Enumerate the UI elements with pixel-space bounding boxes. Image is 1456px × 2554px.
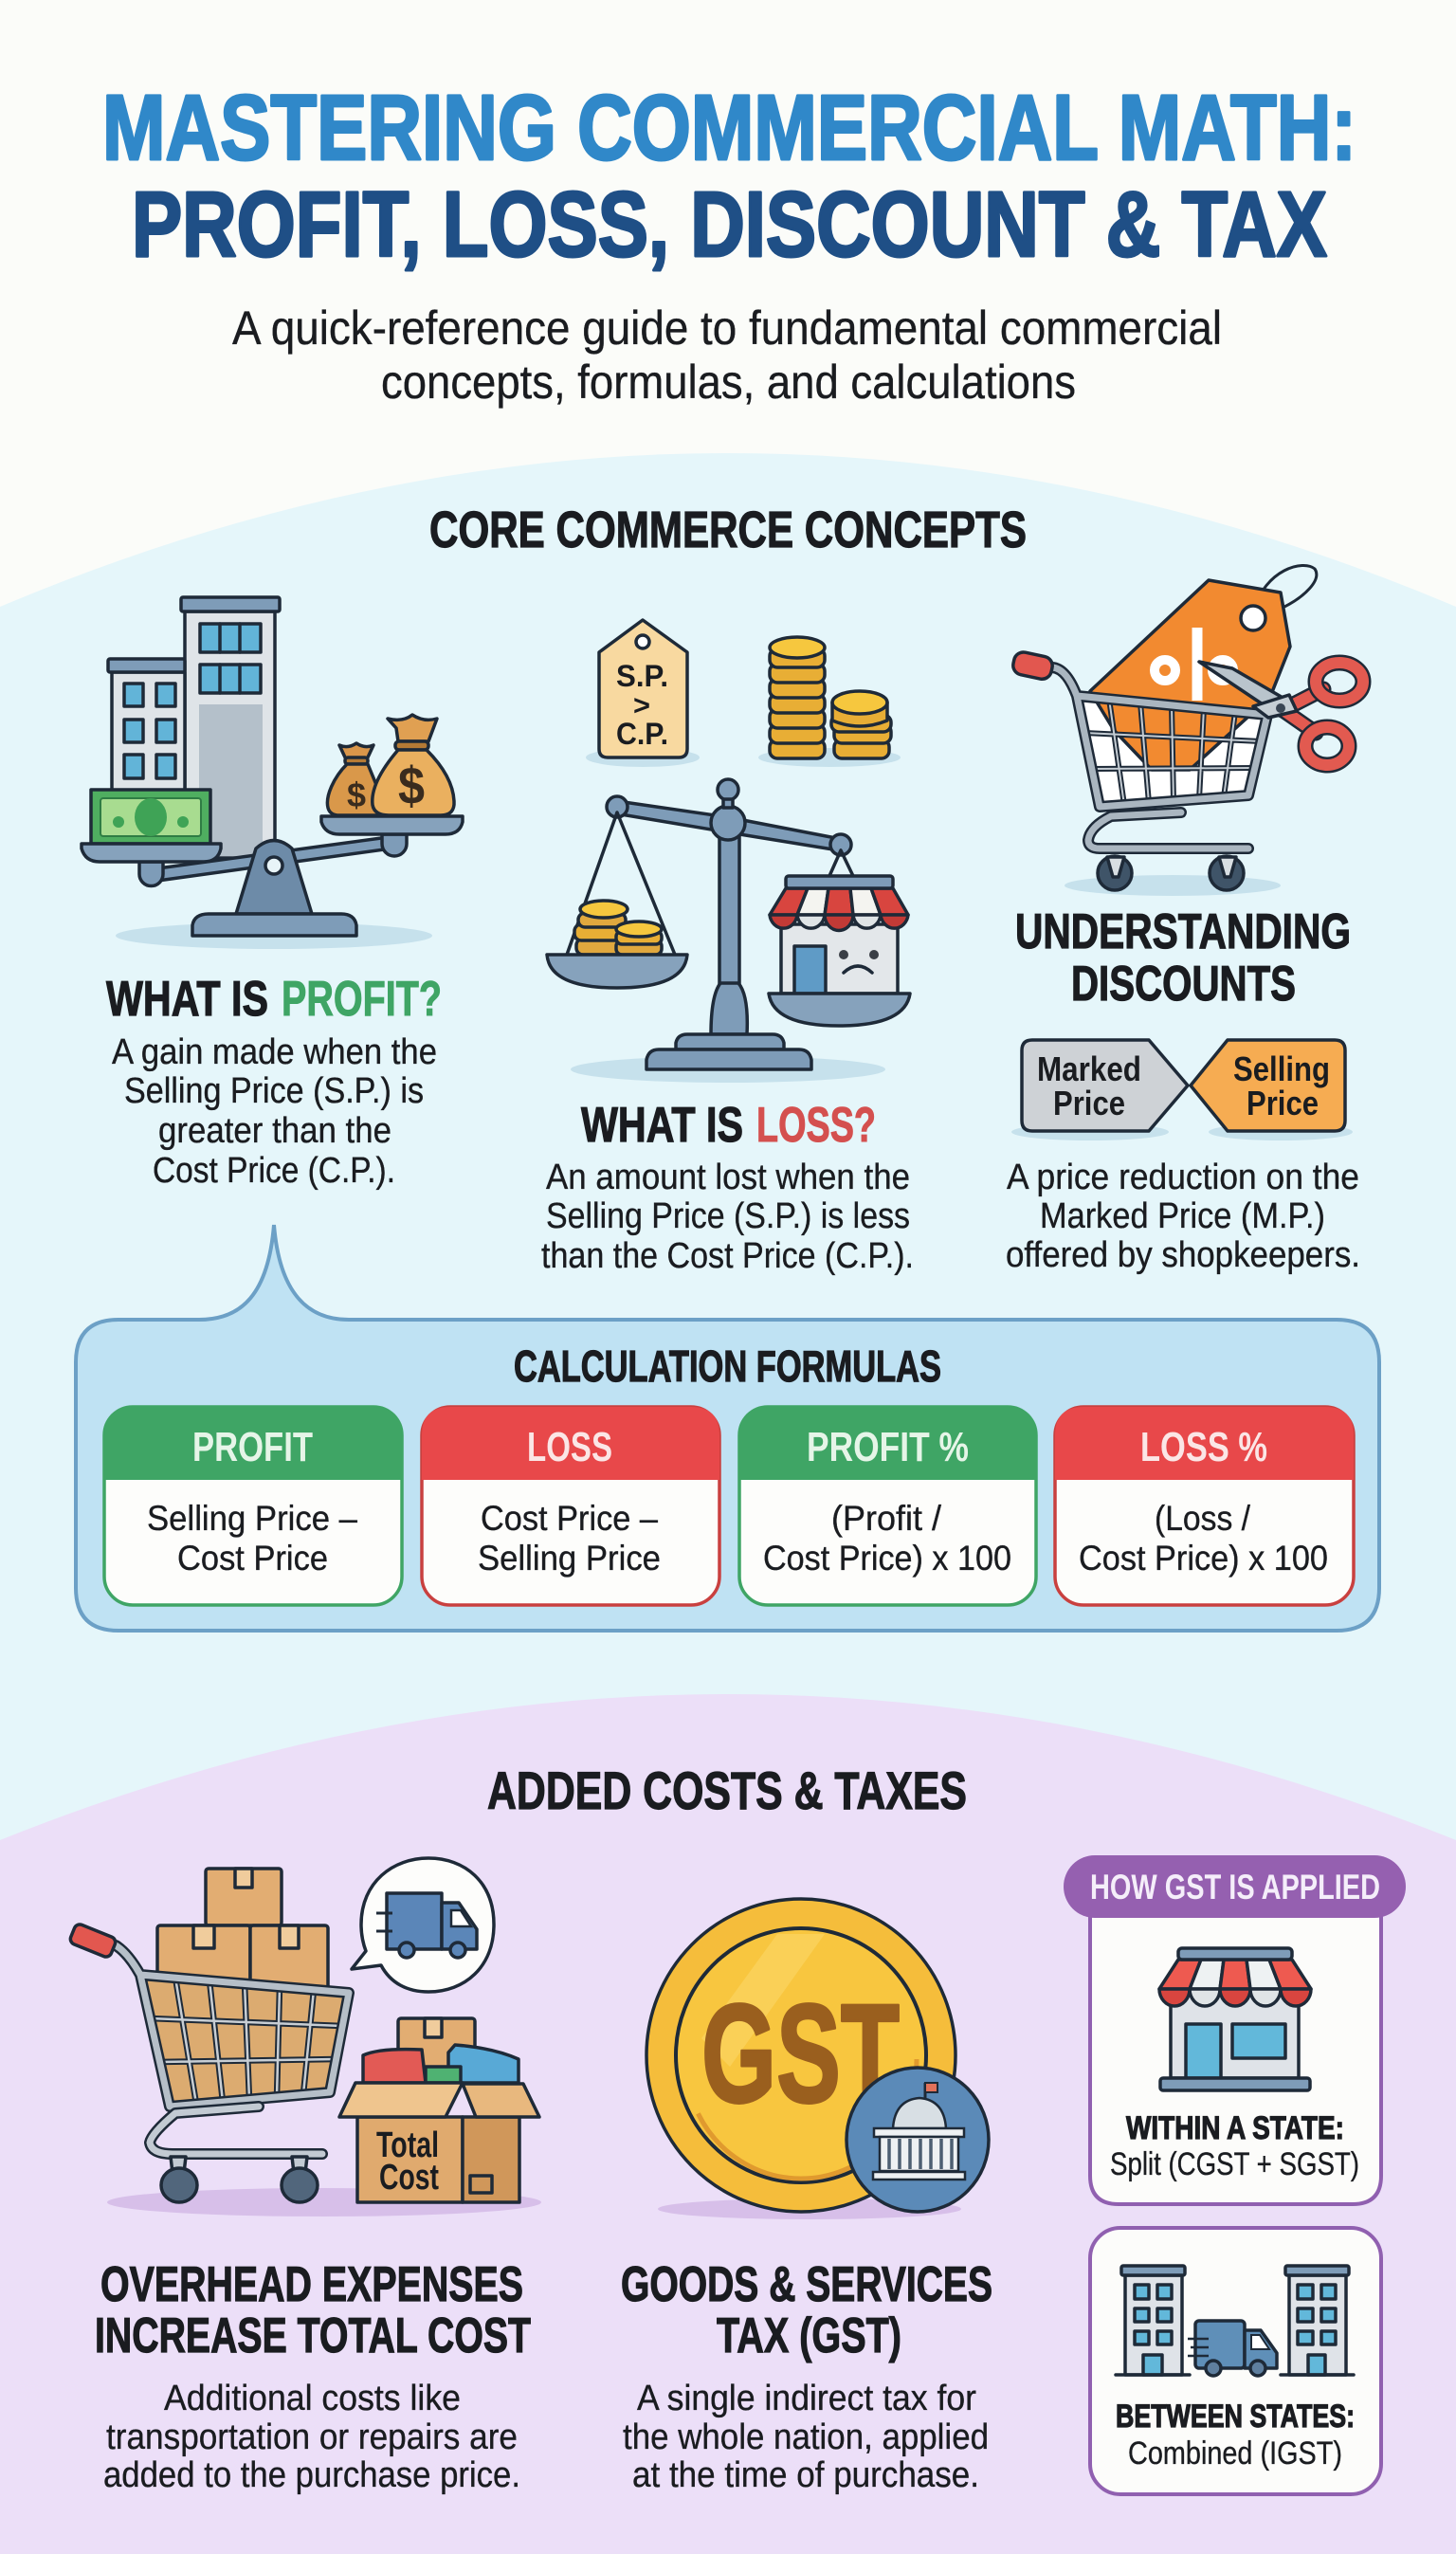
text: loss description: than the Cost Price (C.P.). — [541, 1236, 914, 1276]
subtitle: concepts, formulas, and calculations — [381, 356, 1076, 409]
icon: left building — [1116, 2266, 1190, 2375]
text: discount description — [1006, 1158, 1360, 1275]
heading: what is loss: WHAT IS — [581, 1098, 743, 1153]
title — [102, 76, 1356, 276]
tag loop — [1253, 565, 1317, 611]
heading: what is profit: WHAT IS — [106, 972, 268, 1027]
icon: right building — [1281, 2266, 1354, 2375]
marked price tag: Price — [1053, 1084, 1125, 1122]
left pan with coins — [547, 812, 687, 988]
card: profit percent: (Profit / — [831, 1499, 942, 1538]
heading: goods and services tax: TAX (GST) — [717, 2308, 901, 2363]
panel: core concepts background — [0, 453, 1456, 1896]
card: profit — [104, 1407, 402, 1605]
heading: goods and services tax: GOODS & SERVICES — [621, 2257, 992, 2312]
heading: overhead expenses: OVERHEAD EXPENSES — [100, 2257, 523, 2312]
card: loss percent: LOSS % — [1140, 1424, 1267, 1470]
text: profit description: Selling Price (S.P.) is — [124, 1071, 424, 1111]
card: loss — [422, 1407, 719, 1605]
card: loss: Selling Price — [478, 1539, 661, 1578]
scale stand and beam — [607, 779, 851, 1069]
card: profit percent: Cost Price) x 100 — [763, 1539, 1011, 1578]
text: profit description — [112, 1032, 437, 1191]
card: loss percent — [1055, 1407, 1354, 1605]
text: GST description: at the time of purchase. — [632, 2455, 979, 2495]
icon: S.P. > C.P. price tag: > — [633, 690, 650, 721]
card: loss percent: Cost Price) x 100 — [1079, 1539, 1328, 1578]
label: within a state: WITHIN A STATE: — [1126, 2110, 1344, 2146]
heading: core commerce concepts: CORE COMMERCE CONCEPTS — [429, 502, 1027, 558]
coin: GST — [701, 1976, 900, 2132]
heading: understanding discounts: DISCOUNTS — [1071, 957, 1296, 1012]
shopping cart — [140, 1975, 349, 2107]
icon: S.P. > C.P. price tag: C.P. — [616, 717, 668, 751]
label: between states: Combined (IGST) — [1128, 2435, 1342, 2472]
orange tag — [1090, 580, 1290, 770]
card: profit percent — [739, 1407, 1036, 1605]
text: overhead description: Additional costs like — [164, 2379, 461, 2418]
subtitle: A quick-reference guide to fundamental commercial — [232, 301, 1222, 355]
total cost box: Cost — [379, 2158, 439, 2198]
panel: added costs background — [0, 1694, 1456, 2554]
card: profit: PROFIT — [192, 1424, 313, 1470]
icon: truck — [1188, 2321, 1277, 2376]
coin — [646, 1899, 956, 2212]
text: discount description: A price reduction on the — [1007, 1158, 1359, 1197]
heading: understanding discounts: UNDERSTANDING — [1015, 904, 1351, 959]
icon: discount cart with tag and scissors — [1011, 565, 1363, 896]
card: loss: LOSS — [527, 1424, 612, 1470]
selling price tag — [1191, 1040, 1345, 1131]
badge: how GST is applied: HOW GST IS APPLIED — [1090, 1868, 1380, 1906]
text: loss description: An amount lost when the — [546, 1158, 910, 1197]
panel: between states — [1090, 2228, 1381, 2494]
heading: overhead expenses — [95, 2257, 531, 2363]
text: GST description: the whole nation, applied — [623, 2417, 989, 2457]
text: overhead description: transportation or repairs are — [106, 2417, 518, 2457]
stacked boxes — [157, 1869, 328, 2001]
heading: what is profit: PROFIT? — [282, 972, 442, 1027]
icon: shop — [1159, 1948, 1311, 2090]
heading: goods and services tax — [621, 2257, 992, 2363]
label: within a state — [1110, 2110, 1359, 2182]
diagram: marked price to selling price — [1011, 1040, 1353, 1140]
selling price tag: Selling — [1233, 1049, 1330, 1088]
heading: calculation formulas: CALCULATION FORMULAS — [514, 1341, 941, 1391]
text: GST description: A single indirect tax for — [637, 2379, 976, 2418]
speech bubble with truck — [352, 1858, 494, 1992]
text: profit description: A gain made when the — [112, 1032, 437, 1072]
text: discount description: Marked Price (M.P.) — [1040, 1196, 1325, 1236]
label: within a state: Split (CGST + SGST) — [1110, 2146, 1359, 2182]
panel: calculation formulas — [76, 1225, 1379, 1631]
tall building — [108, 597, 280, 858]
heading: what is profit — [106, 972, 442, 1027]
money bags — [327, 715, 454, 815]
text: profit description: Cost Price (C.P.). — [153, 1151, 395, 1191]
icon: S.P. > C.P. price tag — [586, 620, 700, 767]
basket backing — [1077, 696, 1267, 807]
card: loss: Cost Price – — [481, 1499, 658, 1538]
text: loss description: Selling Price (S.P.) is less — [546, 1196, 910, 1236]
icon: GST coin with government badge — [646, 1899, 989, 2219]
text: overhead description — [103, 2379, 520, 2495]
government badge — [846, 2068, 989, 2212]
heading: added costs and taxes: ADDED COSTS & TAXES — [487, 1760, 967, 1820]
card: profit: Selling Price – — [147, 1499, 357, 1538]
card: profit percent: PROFIT % — [807, 1424, 969, 1470]
cart frame — [1052, 667, 1267, 848]
text: discount description: offered by shopkeepers. — [1006, 1235, 1360, 1275]
text: loss description — [541, 1158, 914, 1276]
banknote — [91, 790, 210, 844]
card: loss percent: (Loss / — [1155, 1499, 1251, 1538]
scissors — [1199, 662, 1363, 765]
icon: profit seesaw: $ — [347, 775, 366, 814]
marked price tag — [1022, 1040, 1188, 1131]
selling price tag: Price — [1247, 1084, 1319, 1122]
icon: coin stacks — [758, 637, 901, 767]
total cost box: Total — [376, 2125, 439, 2165]
panel: within a state — [1090, 1906, 1381, 2204]
beam — [82, 816, 463, 936]
text: profit description: greater than the — [158, 1111, 391, 1151]
card: profit: Cost Price — [177, 1539, 328, 1578]
icon: profit seesaw — [82, 597, 463, 949]
text: GST description — [623, 2379, 989, 2495]
badge: how GST is applied — [1064, 1855, 1406, 1918]
icon: S.P. > C.P. price tag: S.P. — [616, 659, 668, 693]
icon: overhead cart and total cost box — [69, 1858, 541, 2217]
marked price tag: Marked — [1037, 1049, 1141, 1088]
icon: profit seesaw: $ — [398, 756, 425, 815]
right pan with sad shop — [769, 850, 910, 1026]
heading: understanding discounts — [1015, 904, 1351, 1012]
label: between states — [1116, 2399, 1355, 2472]
text: overhead description: added to the purchase price. — [103, 2455, 520, 2495]
subtitle — [232, 301, 1222, 409]
icon: loss balance scale — [547, 779, 910, 1083]
total cost box — [339, 2018, 539, 2202]
label: between states: BETWEEN STATES: — [1116, 2399, 1355, 2435]
heading: what is loss: LOSS? — [756, 1098, 876, 1153]
heading: overhead expenses: INCREASE TOTAL COST — [95, 2308, 531, 2363]
heading: what is loss — [581, 1098, 876, 1153]
